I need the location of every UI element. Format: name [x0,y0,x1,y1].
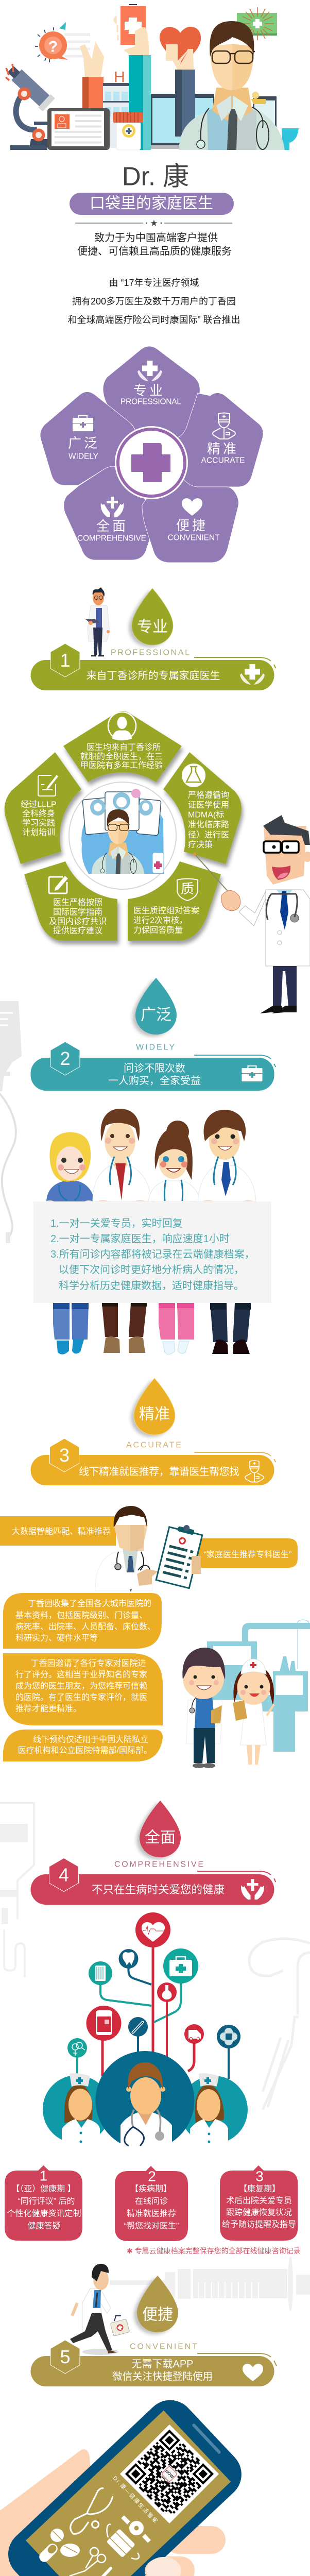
petal: bottom left: 国际医学指南 [53,908,102,917]
card: recovery stage: 3 [255,2168,264,2184]
star divider [75,219,232,227]
icon: raised hand with orange sleeve [80,41,104,109]
card: sub-health stage [5,2165,82,2241]
illustration: cartoon doctor with pointer [193,815,310,1013]
icon: medicine jar [113,112,143,150]
petal: top [63,711,182,782]
panel: offline booking note: 线下预约仅适用于中国大陆私立 [33,1735,148,1744]
banner: accurate: 3 [59,1445,70,1466]
icon: medkit circle [163,1948,198,1984]
card: recovery stage: 跟踪健康恢复状况 [226,2208,292,2217]
petal: widely [68,416,100,461]
banner: comprehensive: 不只在生病时关爱您的健康 [92,1884,225,1896]
subtitle pill: 口袋里的家庭医生 [90,195,213,212]
drop: 便捷: 便捷 [142,2306,173,2324]
petal: left: 经过LLLP [21,800,57,809]
background: IV bag [0,1001,22,1243]
card: illness stage: 精准就医推荐 [127,2209,176,2218]
background: syringe grey [0,1803,34,1977]
petal: convenient: CONVENIENT [168,534,220,542]
drop: 专业: 专业 [137,618,168,636]
illustration: flat doctor [179,21,285,150]
icon: central cross [115,426,188,499]
panel: hospital data: 科研实力、硬件水平等 [15,1633,98,1642]
illustration: hand holding phone with QR [0,2390,252,2576]
petal: top: 就职的全职医生，在三 [80,752,163,761]
petal: widely: WIDELY [68,452,98,461]
illustration: medical machine background [207,1620,310,1752]
card: sub-health stage: 【（亚）健康期 】 [11,2184,76,2194]
petal: right: 准化临床路 [188,820,229,829]
petal: bottom left: 及国内诊疗共识 [49,917,107,926]
subtitle pill [70,193,234,215]
petal: left: 计划培训 [22,827,55,837]
petal: top: 甲医院有多年工作经验 [80,760,163,770]
icon: heart circle [135,1912,170,1947]
illustration: running doctor with kit [70,2264,130,2355]
panel: hospital data [3,1593,162,1649]
banner: widely: 一人购买，全家受益 [108,1075,201,1087]
card: illness stage [115,2166,188,2241]
icon: tablet with record [47,108,110,150]
intro text: 致力于为中国高端客户提供 [94,232,218,244]
petal: bottom right: 力保回答质量 [133,925,183,935]
header illustration [4,4,299,150]
icon: green card with sun [237,7,277,40]
phone body [0,2390,252,2576]
petal: comprehensive: 全面 [96,518,128,534]
person: female doctor [148,1121,200,1208]
panel: expert rating: 成为您的医生朋友，为您推荐可信赖 [15,1682,147,1691]
icon: bottle circle [89,1961,112,1985]
petal: bottom left [24,861,117,941]
petal: professional [120,361,181,406]
panel: widely list: 1.一对一关爱专员，实时回复 [50,1217,183,1229]
icon: hospital building: H [114,69,125,86]
icon: flask circle [157,1982,177,2002]
icon: left nurse [43,2073,111,2148]
icon: question bubble [35,22,90,62]
petal: left [5,752,81,864]
star divider: ★ [150,219,158,227]
english label: COMPREHENSIVE [114,1860,203,1869]
center doctor medallion [69,782,176,889]
petal: bottom right: 进行2次审核， [133,916,187,925]
petal: bottom left: 提供医疗建议 [53,926,102,936]
panel: expert rating: 推荐才能更精准。 [15,1704,81,1714]
chart: health tree [43,1912,248,2151]
panel: expert rating: 丁香园邀请了各行专家对医院进 [31,1659,146,1668]
petal: widely: 广泛 [68,435,100,451]
section 1 header: professional [31,587,276,690]
app caption: Dr.康—健康生活管家 [112,2475,160,2525]
section 5 header: convenient [31,2264,277,2386]
petal: bottom left: 医生严格按照 [53,897,102,907]
drop: 全面: 全面 [145,1829,176,1846]
flower diagram [40,346,263,563]
icon: gender circle [67,2038,87,2058]
intro text: 便捷、可信赖且高品质的健康服务 [77,245,232,257]
banner: convenient: 微信关注快捷登陆使用 [112,2371,213,2382]
petal: comprehensive: COMPREHENSIVE [77,534,146,543]
banner: professional: 1 [60,650,71,671]
section 2 header: widely [31,978,276,1091]
drop: 便捷 [134,2276,178,2334]
band: big data matching: 大数据智能匹配、精准推荐 [12,1527,111,1536]
band: family doctor recommends: “家庭医生推荐专科医生” [204,1550,291,1559]
band: big data matching [0,1516,116,1546]
illustration: doctor holding clipboard [95,1506,204,1592]
petal: right: 径）进行医 [188,831,229,840]
illustration: doctor with clipboard [85,587,110,656]
panel: hospital data: 基本资料，包括医院级别、门诊量、 [15,1611,147,1620]
petal: bottom right: 医生质控组对答案 [133,906,199,915]
drop: 广泛 [132,978,177,1037]
english label: PROFESSIONAL [111,648,190,657]
title: Dr. 康: Dr. 康 [122,162,189,191]
panel: widely list: 科学分析历史健康数据，适时健康指导。 [59,1280,244,1292]
petal: convenient: 便捷 [176,518,208,533]
petal: left: 全科终身 [22,809,55,818]
card: illness stage: 2 [148,2168,156,2184]
panel: widely list: 以便下次问诊时更好地分析病人的情况， [59,1264,244,1276]
card: illness stage: 在线问诊 [135,2197,168,2206]
icon: thermometer circle [128,2017,148,2037]
drop: 专业 [129,588,173,647]
panel: widely list [33,1201,271,1303]
illustration: doctors' legs [53,1303,251,1354]
finger tips over phone [113,2557,187,2576]
petal: bottom right: 质 [181,881,194,896]
card: illness stage: 【疾病期】 [130,2184,171,2194]
petal: comprehensive [77,497,146,543]
intro text: 和全球高端医疗险公司时康国际” 联合推出 [68,315,240,325]
petal: right: MDMA(标 [188,810,224,819]
icon: ambulance circle [184,2024,204,2044]
intro text: 拥有200多万医生及数千万用户的丁香园 [72,296,236,307]
card: illness stage: “帮您找对医生” [124,2222,179,2231]
banner: widely: 问诊不限次数 [124,1062,185,1074]
panel: offline booking note: 医疗机构和公立医院特需部/国际部。 [18,1745,152,1755]
person: male doctor two [198,1110,256,1209]
hand [0,2449,226,2576]
icon: heart in hand and navy sleeve [160,27,201,137]
panel: expert rating [3,1653,163,1725]
petal: accurate [201,413,245,465]
icon: question bubble: ? [48,38,58,56]
icon: right nurse [180,2073,248,2148]
section 3 header: accurate [31,1378,276,1485]
icon: tooth circle [118,1949,138,1969]
banner: professional: 来自丁香诊所的专属家庭医生 [87,670,220,682]
petal: professional: PROFESSIONAL [120,398,181,406]
icon: microscope [4,62,55,150]
background: stethoscope grey [249,1939,310,2110]
panel: widely list: 2.一对一专属家庭医生，响应速度1小时 [50,1233,230,1245]
banner: widely [31,1042,276,1091]
panel: hospital data: 丁香园收集了全国各大城市医院的 [28,1599,151,1608]
petal: convenient [168,498,220,542]
card: sub-health stage: “同行评议” 后的 [18,2197,75,2206]
petal: professional: 专业 [133,383,165,398]
banner: comprehensive [31,1858,276,1905]
icon: orange phone with cross and teal sleeve [114,4,151,150]
drop: 全面 [136,1801,181,1859]
petal: right [163,752,242,864]
banner: convenient [31,2340,277,2386]
intro text [68,232,240,325]
intro text: 由 “17年专注医疗领域 [109,278,199,288]
drop: 广泛: 广泛 [141,1007,171,1023]
card: sub-health stage: 个性化健康资讯定制 [7,2209,81,2218]
english label: WIDELY [136,1043,175,1052]
icon: central doctor [96,2051,195,2151]
banner: professional [31,643,276,690]
icon: monitor [151,94,214,149]
petal: accurate: ACCURATE [201,456,245,465]
petal: bottom right [128,861,221,941]
petal: top: 医生均来自丁香诊所 [87,743,161,752]
section 4 header: comprehensive [31,1801,276,1905]
drop: 精准 [131,1378,175,1437]
panel: hospital data: 病死率、出院率、人员配备、床位数、 [15,1622,156,1631]
banner: accurate: 线下精准就医推荐，靠谱医生帮您找 [79,1466,239,1478]
petal: right: 疗决策 [188,840,213,849]
petal: left: 学习实践 [22,818,55,827]
panel: five petals [40,346,263,563]
english label: ACCURATE [126,1440,181,1450]
banner: convenient: 无需下载APP [131,2358,194,2370]
panel: professional pentagon cluster [5,711,310,1013]
illustration: cartoon doctor and nurse [182,1648,274,1768]
band: family doctor recommends [196,1538,298,1568]
illustration: four doctors [44,1109,256,1209]
petal: accurate: 精准 [207,441,239,456]
english label: CONVENIENT [130,2342,197,2351]
card: recovery stage [220,2165,298,2241]
banner: comprehensive: 4 [59,1864,69,1886]
banner: convenient: 5 [60,2346,71,2367]
card: recovery stage: 给予随访提醒及指导 [222,2219,296,2229]
card: sub-health stage: 1 [40,2168,47,2183]
banner: widely: 2 [60,1048,71,1069]
person: male doctor one [93,1109,151,1209]
panel: widely list: 3.所有问诊内容都将被记录在云端健康档案， [50,1248,255,1260]
card: recovery stage: 【康复期】 [239,2184,280,2194]
icon: clipboard and bowl behind doctor [251,92,299,150]
petal: right: 证医学使用 [188,801,229,810]
drop: 精准: 精准 [139,1405,170,1423]
panel: offline booking note [3,1730,163,1761]
footnote: ✱ 专属云健康档案完整保存您的全部在线健康咨询记录 [127,2247,301,2255]
panel: expert rating: 行了评分。这相当于业界知名的专家 [15,1670,147,1680]
tree stems [77,1930,229,2079]
icon: hospital building [103,69,130,148]
icon: blood bag circle [87,2006,122,2041]
icon: bandage circle [217,2025,240,2048]
panel: expert rating: 的医院。有了医生的专家评价，就医 [15,1693,147,1702]
QR code [120,2425,219,2523]
QR code: NOW [164,2469,175,2479]
background: syringe [110,2257,310,2311]
petal: right: 严格遵循询 [188,790,229,800]
icons on phone screen [37,2488,149,2576]
person: blonde nurse [44,1132,95,1208]
card: sub-health stage: 健康答疑 [27,2222,61,2231]
card: recovery stage: 术后出院关爱专员 [226,2196,292,2205]
banner: accurate [31,1438,276,1485]
